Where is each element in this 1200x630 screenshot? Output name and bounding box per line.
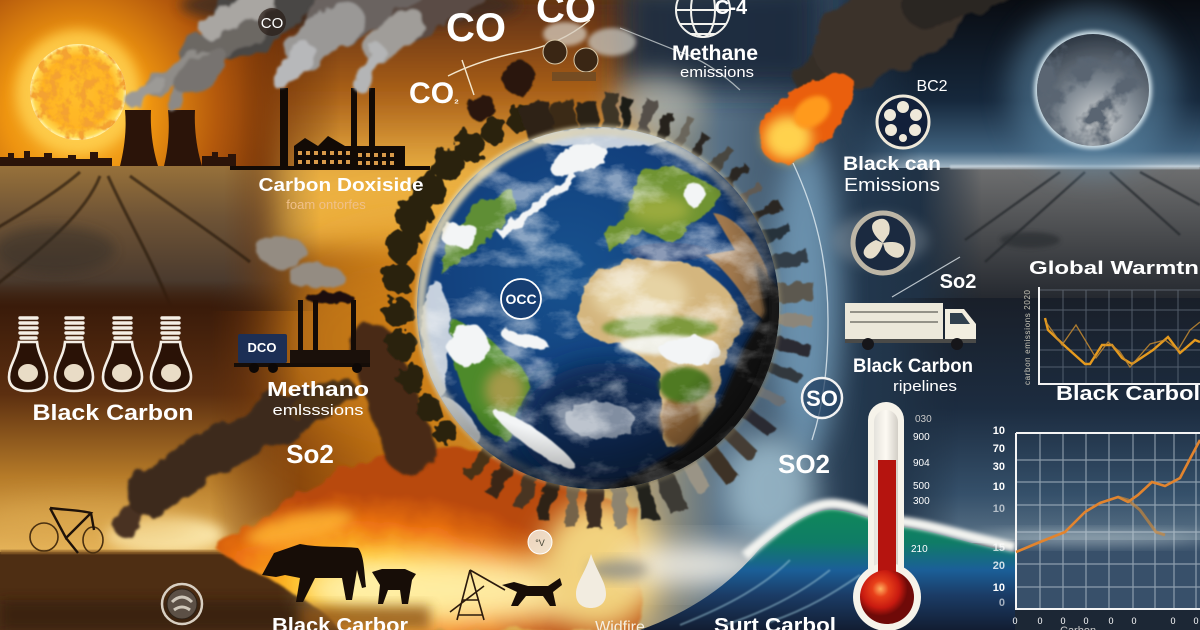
x axis numbers: 0 xyxy=(1170,616,1176,626)
lower-left cracked ground xyxy=(0,550,340,630)
factory smoke plumes xyxy=(284,0,470,82)
label: small CO: CO xyxy=(261,15,283,32)
lower right sea xyxy=(970,531,1200,630)
city skyline ring around globe xyxy=(463,92,814,528)
plot grid xyxy=(1015,433,1200,609)
y axis numbers: 0 xyxy=(999,597,1005,609)
label: black can emissions: Black can xyxy=(843,154,941,175)
icon: bicycle xyxy=(30,508,103,553)
x axis numbers: 0 xyxy=(1037,616,1043,626)
soot particles and connection lines xyxy=(448,20,740,122)
chart caption: Black Carbol xyxy=(1056,383,1200,405)
thermometer scale numbers: 300 xyxy=(913,496,930,507)
icon and label: SO ring: SO xyxy=(806,386,838,411)
label: methane top: emissions xyxy=(680,64,754,81)
label: SO2 lower: SO2 xyxy=(778,449,830,479)
plot grid xyxy=(1040,290,1200,384)
surrounding trees xyxy=(382,104,534,444)
label: carbon dioxide: foam ontorfes xyxy=(286,197,366,212)
factory silhouette xyxy=(230,88,430,170)
continent: South America xyxy=(450,317,530,440)
y axis numbers: 20 xyxy=(993,560,1005,572)
globe marker: OCC: OCC xyxy=(505,291,537,307)
label: black can emissions: Emissions xyxy=(844,175,940,195)
label: So2 left: So2 xyxy=(286,439,334,469)
continent: Arabia xyxy=(705,212,768,320)
data lines xyxy=(1045,318,1200,364)
x axis numbers: 0 xyxy=(1108,616,1114,626)
icon: large fan with smoke xyxy=(832,213,928,273)
label: black carbon pipelines: Black Carbon xyxy=(853,356,973,377)
label: black carbon pipelines: ripelines xyxy=(893,378,957,395)
label: BC2: BC2 xyxy=(916,78,948,95)
cloud texture xyxy=(417,127,779,489)
continent: North America xyxy=(442,190,514,275)
connector arc xyxy=(793,163,828,440)
icon: fan xyxy=(877,96,929,148)
cloud bands xyxy=(422,128,720,476)
x axis numbers: 0 xyxy=(1012,616,1018,626)
right sky xyxy=(840,0,1200,168)
label: methano emissions xyxy=(267,379,369,419)
fire xyxy=(215,447,660,630)
mid-left brown band and golden horizon xyxy=(0,280,300,553)
dark crescent xyxy=(604,262,779,489)
y axis numbers: 70 xyxy=(993,443,1005,455)
label: black can emissions xyxy=(843,154,941,195)
y axis numbers: 10 xyxy=(993,582,1005,594)
animal: calf xyxy=(372,569,416,604)
thermometer scale numbers: 030 xyxy=(915,414,932,425)
icon: ring badge xyxy=(162,584,202,624)
smoke from cooling towers xyxy=(130,0,290,104)
wave xyxy=(620,504,1015,630)
continent: Europe xyxy=(603,167,720,250)
label: carbon dioxide: Carbon Doxiside xyxy=(258,175,424,195)
moon xyxy=(1009,6,1177,174)
truck xyxy=(845,303,976,350)
thermometer xyxy=(853,402,932,630)
sun xyxy=(16,30,140,154)
thermometer scale numbers: 210 xyxy=(911,544,928,555)
small circle marker xyxy=(528,530,552,554)
chart title: Global Warmtn xyxy=(1029,258,1199,278)
y axis numbers: 10 xyxy=(993,503,1005,515)
factory lit windows xyxy=(298,151,394,165)
label: methane top: Methane xyxy=(672,42,758,65)
thermometer scale numbers: 900 xyxy=(913,432,930,443)
y axis numbers: 30 xyxy=(993,461,1005,473)
y axis caption: carbon emissions 2020 xyxy=(1023,289,1032,385)
label: SO2 right: So2 xyxy=(940,271,976,293)
thermometer scale numbers: 500 xyxy=(913,481,930,492)
small factory and truck: DCO xyxy=(248,340,276,355)
thermometer scale numbers xyxy=(911,414,932,555)
thermometer scale numbers: 904 xyxy=(913,458,930,469)
y axis numbers xyxy=(993,425,1005,609)
animal: dog xyxy=(502,578,562,606)
dark smoke haze at top xyxy=(180,0,520,29)
lower right panel background xyxy=(890,298,1200,543)
label: methano emissions: emlsssions xyxy=(272,402,364,419)
y axis numbers: 15 xyxy=(993,542,1005,554)
chart: global warming xyxy=(1023,258,1200,405)
small circle marker: °V xyxy=(535,538,545,548)
cooling towers and skyline xyxy=(0,110,236,166)
burning meteor and black smoke xyxy=(760,0,1000,163)
label: small CO xyxy=(258,8,286,36)
label: black carbon pipelines xyxy=(853,356,973,395)
x axis numbers: 0 xyxy=(1131,616,1137,626)
left ground with tracks xyxy=(0,166,320,311)
right ground xyxy=(920,165,1200,302)
icon and label: SO ring xyxy=(802,378,842,418)
globe marker: OCC xyxy=(501,279,541,319)
continent: Africa xyxy=(578,253,743,447)
small factory and truck xyxy=(234,236,370,373)
icon: water drop xyxy=(576,554,648,608)
bulb icons row xyxy=(9,318,191,391)
label: carbon dioxide xyxy=(258,175,424,212)
x axis numbers: 0 xyxy=(1083,616,1089,626)
left sky xyxy=(0,0,340,168)
label: black carbon left: Black Carbon xyxy=(32,400,194,425)
label: CO2 near factory: CO₂ xyxy=(409,77,459,110)
bulb 1 xyxy=(9,318,47,391)
x axis numbers xyxy=(1012,616,1199,626)
bulb 3 xyxy=(103,318,142,391)
label: methane top xyxy=(672,42,758,81)
connector line to truck xyxy=(892,257,960,297)
wildfire smoke plume xyxy=(125,350,410,525)
label: large CO top: CO xyxy=(446,6,506,50)
methane icon: globe grid xyxy=(676,0,730,37)
y axis numbers: 10 xyxy=(993,481,1005,493)
animal: cow xyxy=(262,544,366,602)
x axis numbers: 0 xyxy=(1193,616,1199,626)
oil rig xyxy=(450,570,505,620)
y axis numbers: 10 xyxy=(993,425,1005,437)
globe xyxy=(415,125,790,505)
Mediterranean xyxy=(630,243,710,261)
bulb 4 xyxy=(151,318,191,391)
chart: lower line graph xyxy=(993,425,1200,630)
data lines xyxy=(1016,440,1200,552)
label: methano emissions: Methano xyxy=(267,379,369,401)
dark southern ocean xyxy=(520,363,700,487)
x axis numbers: 0 xyxy=(1060,616,1066,626)
bulb 2 xyxy=(55,318,93,391)
